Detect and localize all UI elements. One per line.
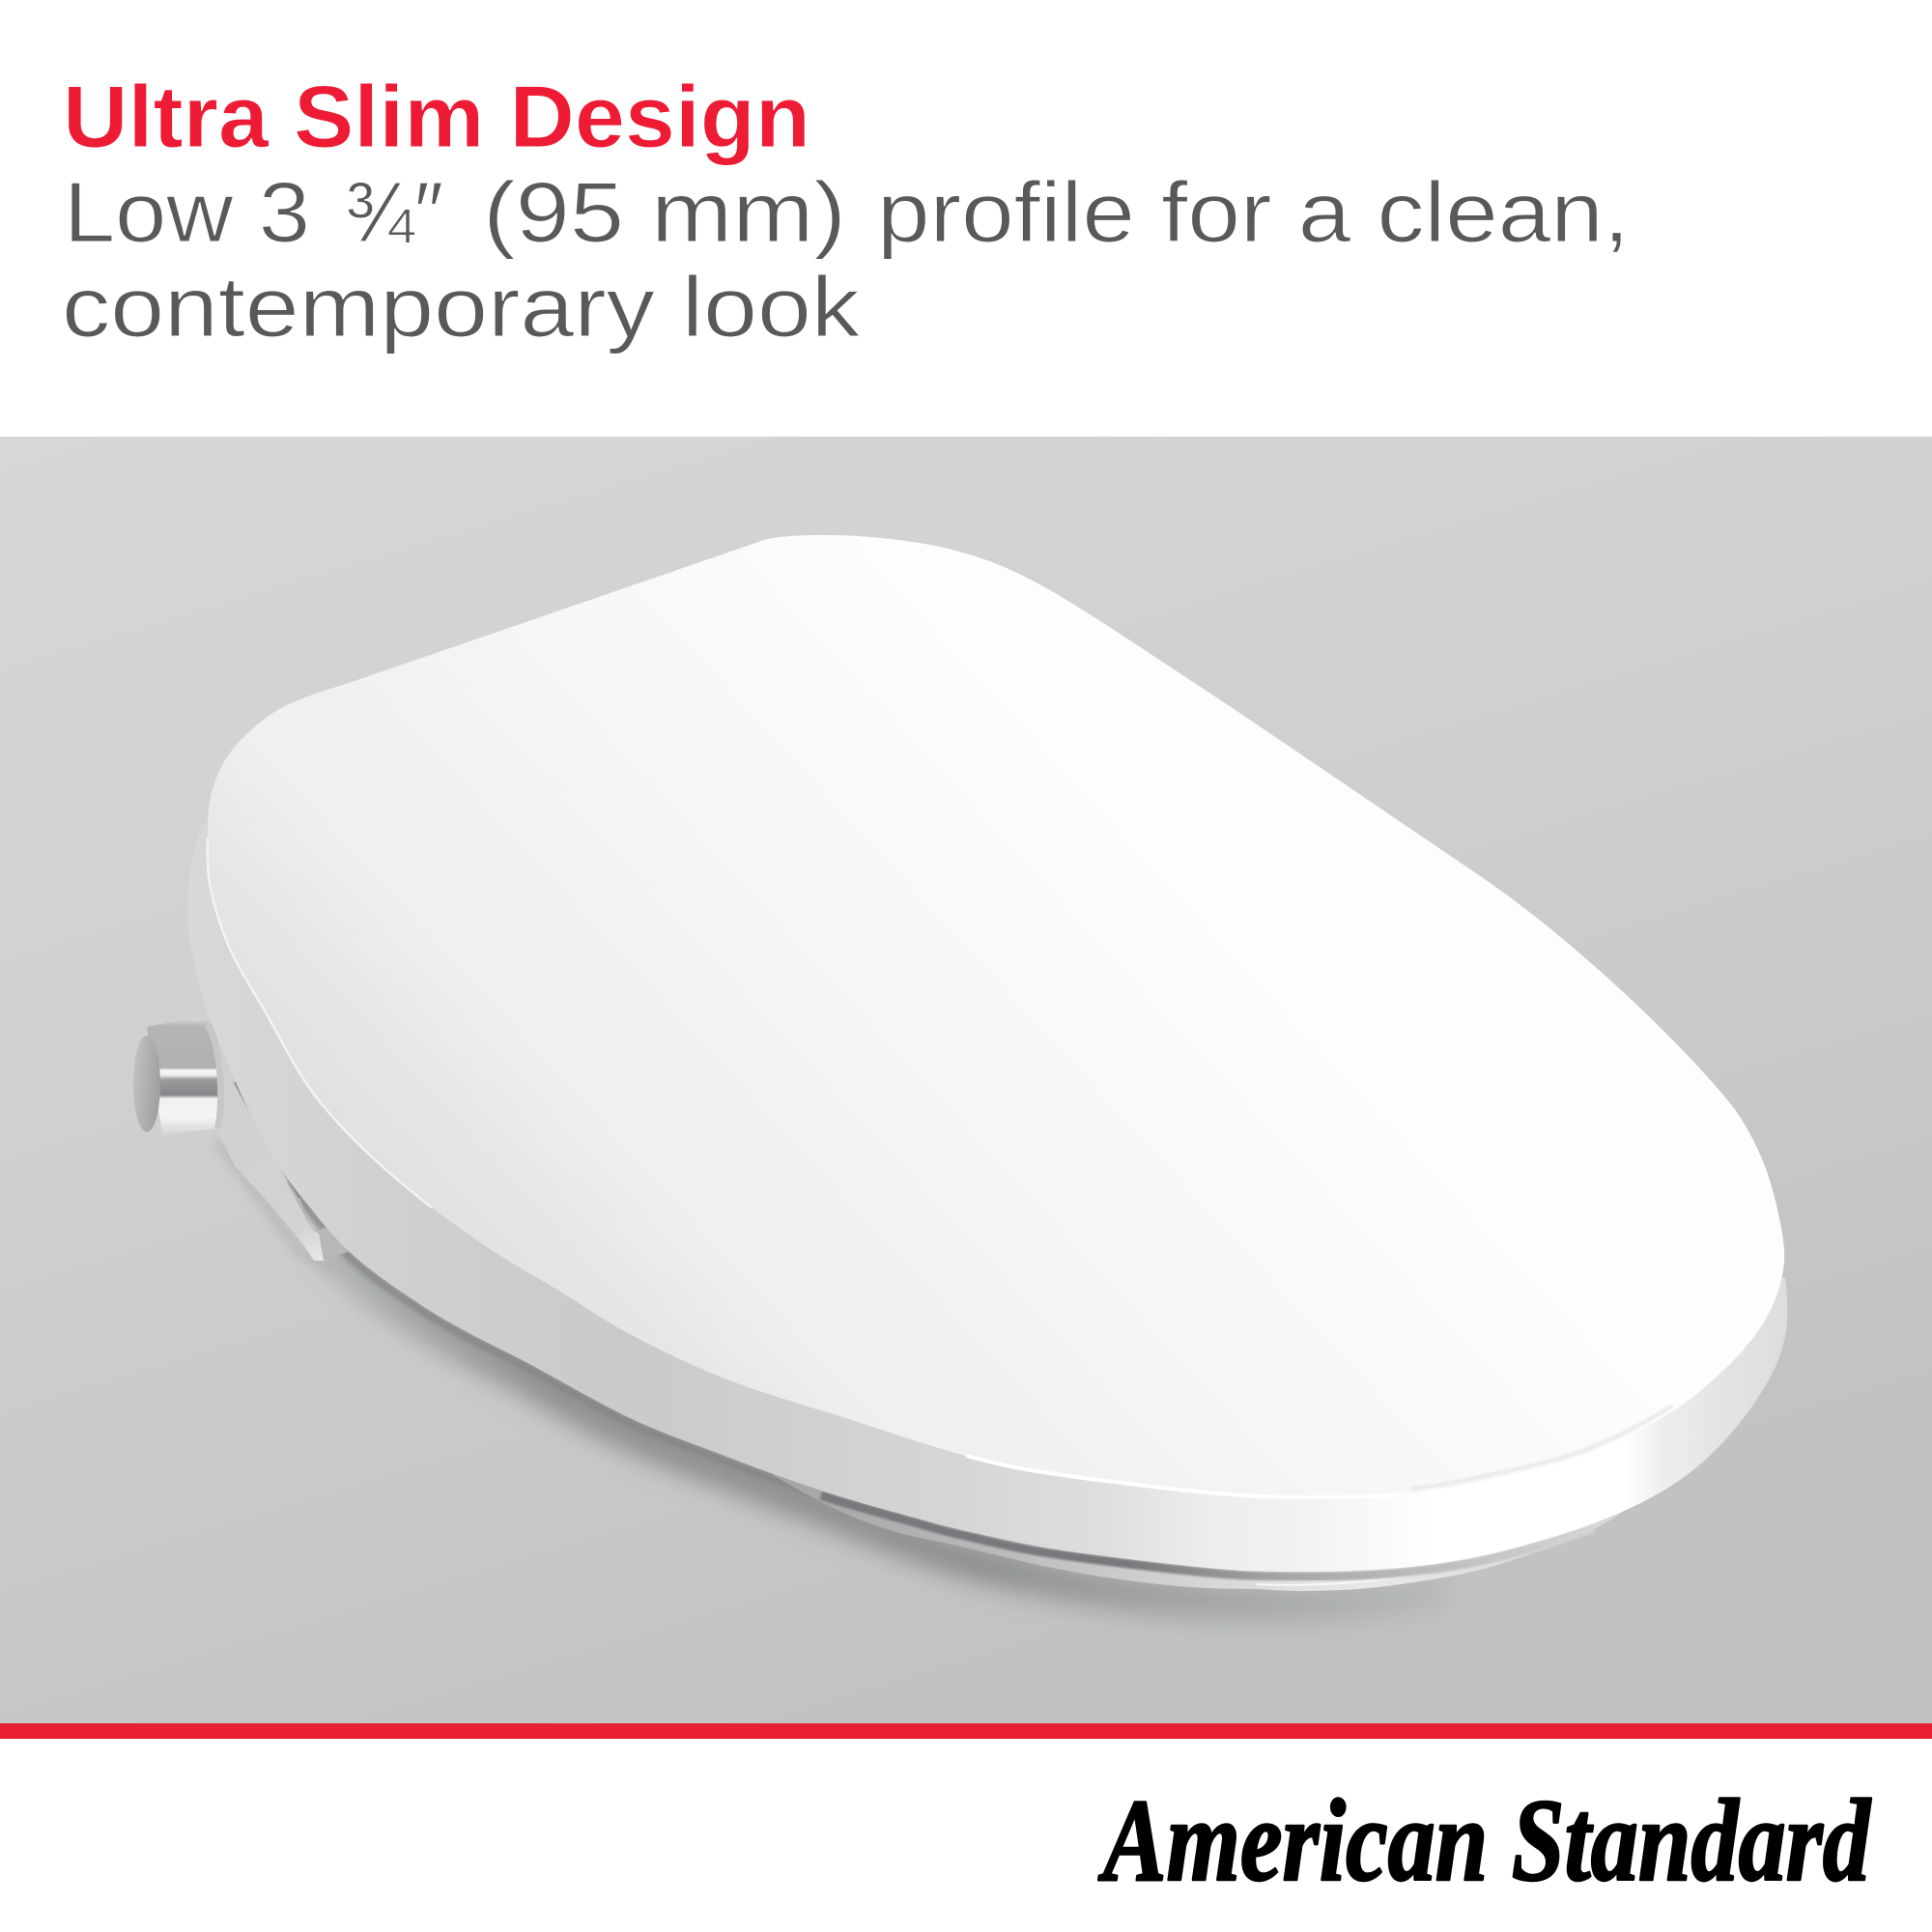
bracket slit line bbox=[235, 1082, 299, 1198]
lid left edge highlight bbox=[208, 838, 432, 1208]
text block: profile description bbox=[62, 164, 1630, 355]
text block: profile description: contemporary look bbox=[62, 259, 861, 355]
panel: white header background bbox=[0, 0, 1932, 437]
lip highlight bbox=[1256, 1571, 1439, 1585]
hinge bracket bbox=[215, 1082, 324, 1261]
soft shadow under the seat bbox=[328, 1246, 1449, 1604]
dark gap between rim and lip bbox=[821, 1495, 1594, 1577]
panel: white footer background bbox=[0, 1739, 1932, 1932]
text block: profile description: profile for a clean, bbox=[877, 164, 1630, 260]
hinge knob bbox=[133, 1017, 224, 1135]
lid rim side wall bbox=[188, 824, 1787, 1572]
hinge bracket shadow bbox=[217, 1140, 333, 1270]
lid top face bbox=[208, 535, 1784, 1497]
product: toilet seat lid illustration bbox=[133, 535, 1787, 1604]
panel: grey product background bbox=[0, 437, 1932, 1723]
bracket foot behind rim bbox=[280, 1159, 355, 1261]
text block: profile description: (95 mm) bbox=[483, 164, 846, 260]
text block: profile description: Low 3 bbox=[64, 164, 310, 260]
lid front edge highlight bbox=[966, 1456, 1401, 1497]
lid front right bevel bbox=[1410, 1406, 1672, 1489]
red divider bar bbox=[0, 1723, 1932, 1739]
lower seat lip bbox=[773, 1449, 1623, 1591]
tight contact shadow under the rim bbox=[290, 1183, 821, 1495]
heading: Ultra Slim Design: Ultra Slim Design bbox=[63, 69, 810, 166]
text block: profile description: ¾″ bbox=[345, 164, 443, 260]
